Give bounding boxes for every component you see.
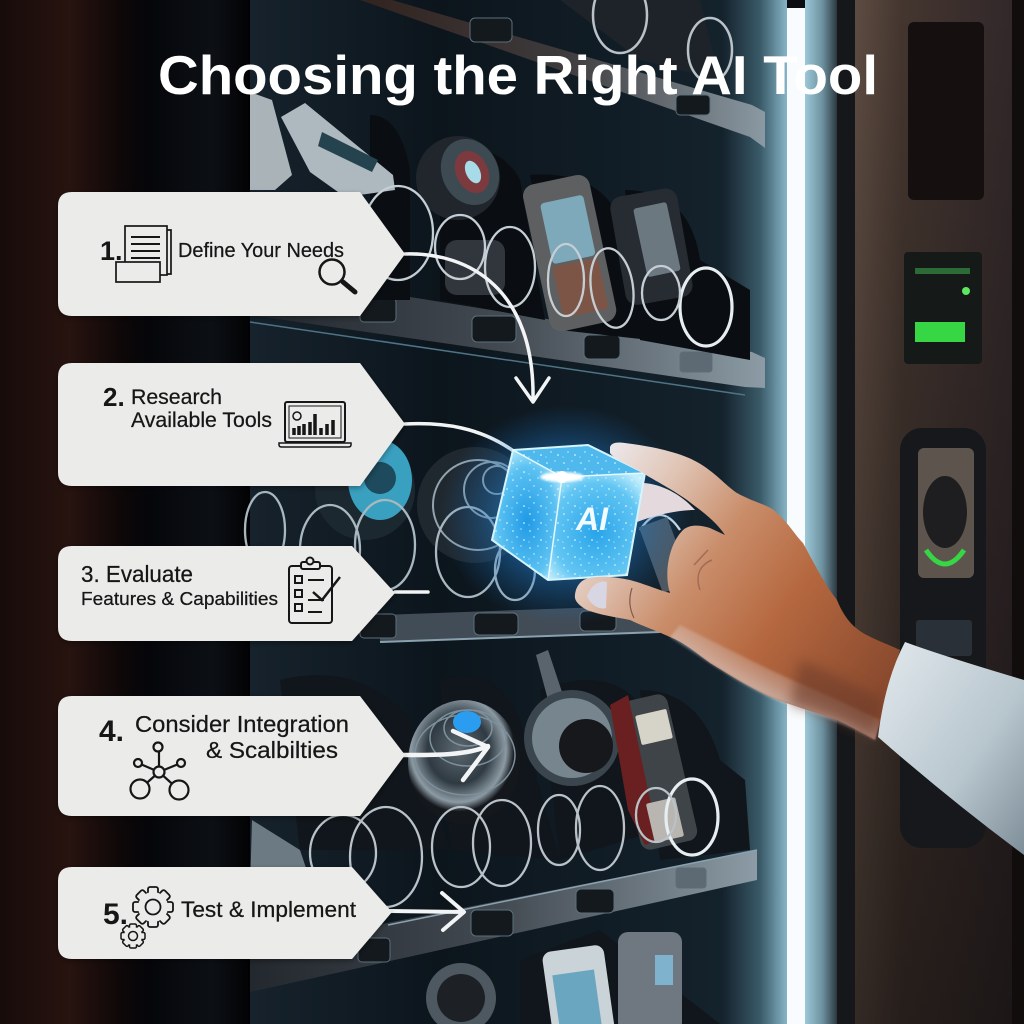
step 3 title: 3. Evaluate [81,561,193,587]
glow behind AI cube [440,405,690,625]
panel: step 5 test [58,867,392,959]
shelf products [245,0,750,1024]
arrow: step 4 to product [402,731,488,780]
icon: small gear [121,924,145,948]
arrow: step 5 to shelf [390,893,464,930]
icon: checklist [289,558,340,623]
step 2 label: Research [131,385,222,409]
step 1 label: Define Your Needs [178,239,344,262]
hand middle finger behind cube [637,483,695,522]
icon: laptop chart [279,402,351,447]
icon: network nodes [130,742,188,800]
step 2 number: 2. [103,382,125,412]
arrow: step 2 to cube [405,424,512,450]
icon: documents [116,226,171,282]
arrows between steps and shelves [390,254,549,930]
step 2 label: Available Tools [131,408,272,432]
row four [280,675,750,860]
arrow: step 3 connector [395,590,428,594]
hand reaching for the cube [575,442,900,740]
title: Choosing the Right AI Tool [158,44,878,106]
top row remnants [560,0,720,80]
step 4 label: Consider Integration [135,711,349,737]
dark dividers row one [370,115,750,360]
step 1 number: 1. [100,236,123,266]
step 5 label: Test & Implement [181,897,356,922]
step 5 number: 5. [103,898,128,931]
step 3 subtitle: Features & Capabilities [81,588,278,609]
step 4 label: & Scalbilties [206,737,338,763]
panel: step 2 research [58,363,405,486]
cube label: AI [575,501,609,537]
icon: magnifying glass [320,260,355,292]
shirt cuff [878,642,1024,855]
panel: step 1 define your needs [58,192,405,316]
panel: step 3 evaluate [58,546,395,641]
step 2 label [131,385,272,432]
panel: step 4 integration [58,696,405,816]
step 4 label [135,711,349,763]
icon: glowing AI cube [492,445,645,580]
step 4 number: 4. [99,715,124,748]
product shelves [250,0,765,992]
arrow: step 1 to cube [405,254,549,402]
bottom row [520,930,720,1024]
icon: large gear [133,887,173,927]
middle row [315,440,415,540]
